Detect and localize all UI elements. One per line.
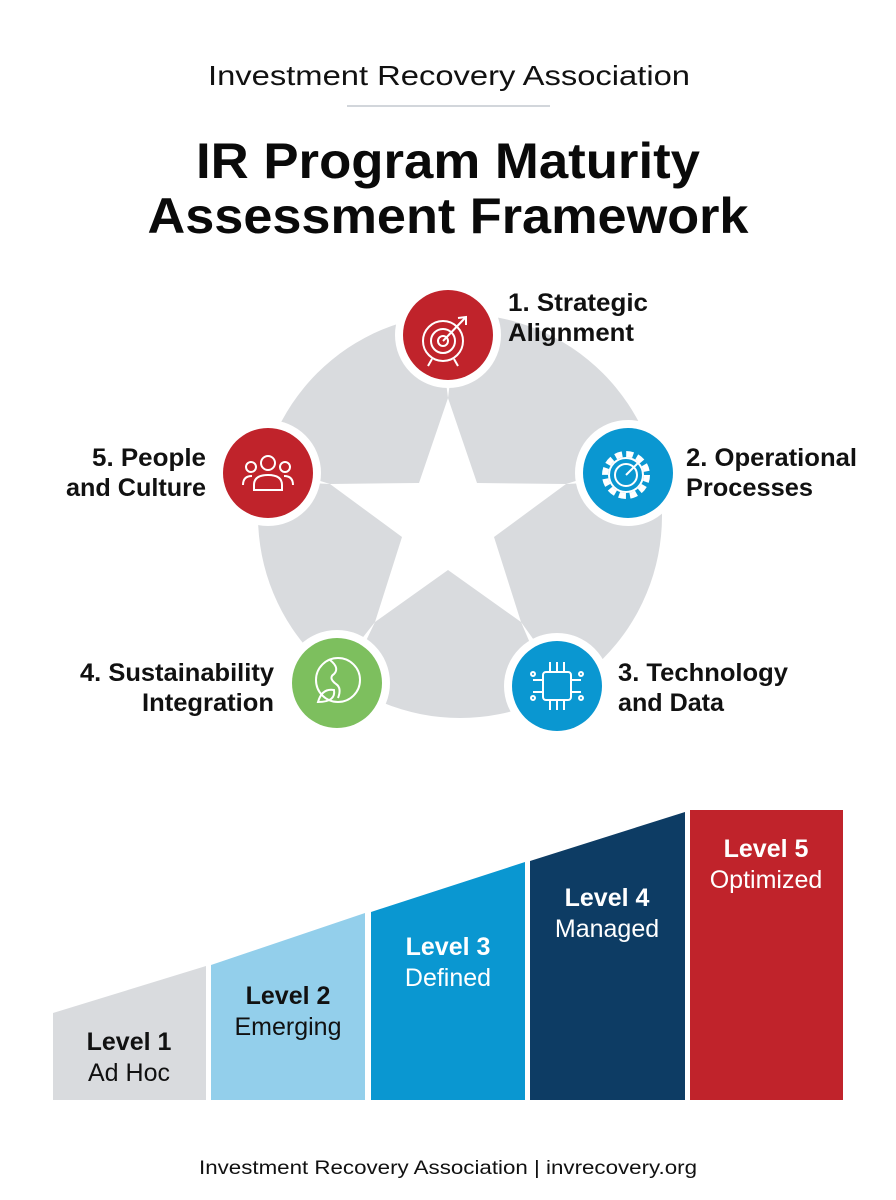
header: association name: Investment Recovery Association (208, 60, 690, 91)
level 1 (53, 966, 206, 1100)
level 5: Level 5 (724, 835, 808, 863)
level 3: Level 3 (406, 933, 490, 961)
label: 1 Strategic Alignment (508, 289, 648, 347)
label: 3 Technology and Data (618, 659, 788, 717)
label: 2 Operational Processes: 2. Operational (686, 444, 857, 472)
level 2: Level 2 (246, 982, 330, 1010)
title: IR Program Maturity (196, 133, 700, 189)
footer: Investment Recovery Association | invrecovery.org (199, 1158, 697, 1179)
label: 3 Technology and Data: 3. Technology (618, 659, 788, 687)
label: 5 People and Culture: and Culture (66, 474, 206, 502)
level 2: Emerging (234, 1013, 342, 1041)
level 1: Ad Hoc (88, 1059, 170, 1087)
pentagon diagram (215, 282, 681, 739)
label: 1 Strategic Alignment: Alignment (508, 319, 635, 347)
label: 5 People and Culture (66, 444, 206, 502)
level 4 (530, 812, 685, 1100)
title (148, 133, 749, 244)
icon: people (People and Culture) (215, 420, 321, 526)
label: 4 Sustainability Integration: 4. Sustainability (80, 659, 274, 687)
maturity staircase (53, 810, 843, 1100)
level 3: Defined (405, 964, 491, 992)
level 5: Optimized (710, 866, 822, 894)
level 1: Level 1 (87, 1028, 171, 1056)
icon: globe (Sustainability Integration) (284, 630, 390, 736)
label: 3 Technology and Data: and Data (618, 689, 725, 717)
level 4: Level 4 (565, 884, 649, 912)
icon: target (Strategic Alignment) (395, 282, 501, 388)
level 4: Managed (555, 915, 659, 943)
level 5 (690, 810, 843, 1100)
level 3 (371, 862, 525, 1100)
title: Assessment Framework (148, 188, 749, 244)
label: 2 Operational Processes: Processes (686, 474, 813, 502)
label: 4 Sustainability Integration (80, 659, 274, 717)
icon: chip (Technology and Data) (504, 633, 610, 739)
label: 2 Operational Processes (686, 444, 857, 502)
label: 4 Sustainability Integration: Integration (142, 689, 274, 717)
icon: gear (Operational Processes) (575, 420, 681, 526)
level 2 (211, 913, 365, 1100)
label: 1 Strategic Alignment: 1. Strategic (508, 289, 648, 317)
label: 5 People and Culture: 5. People (92, 444, 206, 472)
